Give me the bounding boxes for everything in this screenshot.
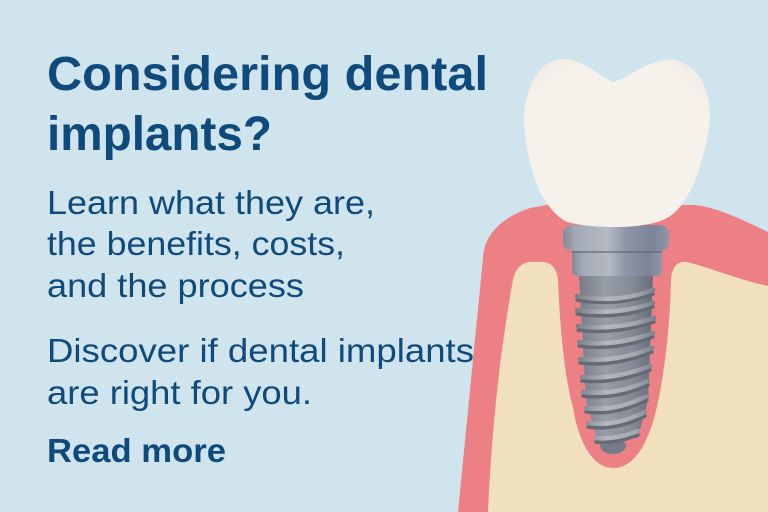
- implant abutment: [563, 225, 669, 276]
- body text: discover: Discover if dental implants: [47, 333, 474, 370]
- screw tip: [600, 438, 626, 454]
- subtitle: what you will learn: and the process: [47, 268, 304, 305]
- title: implants?: [47, 108, 272, 161]
- body text: discover: [47, 333, 474, 412]
- title: [47, 48, 488, 161]
- illustration: dental implant in jaw: [458, 59, 768, 512]
- implant screw: [577, 275, 654, 454]
- subtitle: what you will learn: Learn what they are,: [47, 185, 375, 222]
- jawbone: [485, 260, 768, 512]
- subtitle: what you will learn: the benefits, costs,: [47, 226, 345, 263]
- body text: discover: are right for you.: [47, 375, 312, 412]
- crown: [524, 59, 710, 227]
- screw body: [579, 275, 653, 438]
- call to action: read more: Read more: [47, 433, 226, 470]
- subtitle: what you will learn: [47, 185, 375, 305]
- screw thread shadows: [577, 294, 654, 442]
- screw threads: [577, 290, 654, 438]
- gum tissue: [458, 205, 768, 512]
- title: Considering dental: [47, 48, 488, 101]
